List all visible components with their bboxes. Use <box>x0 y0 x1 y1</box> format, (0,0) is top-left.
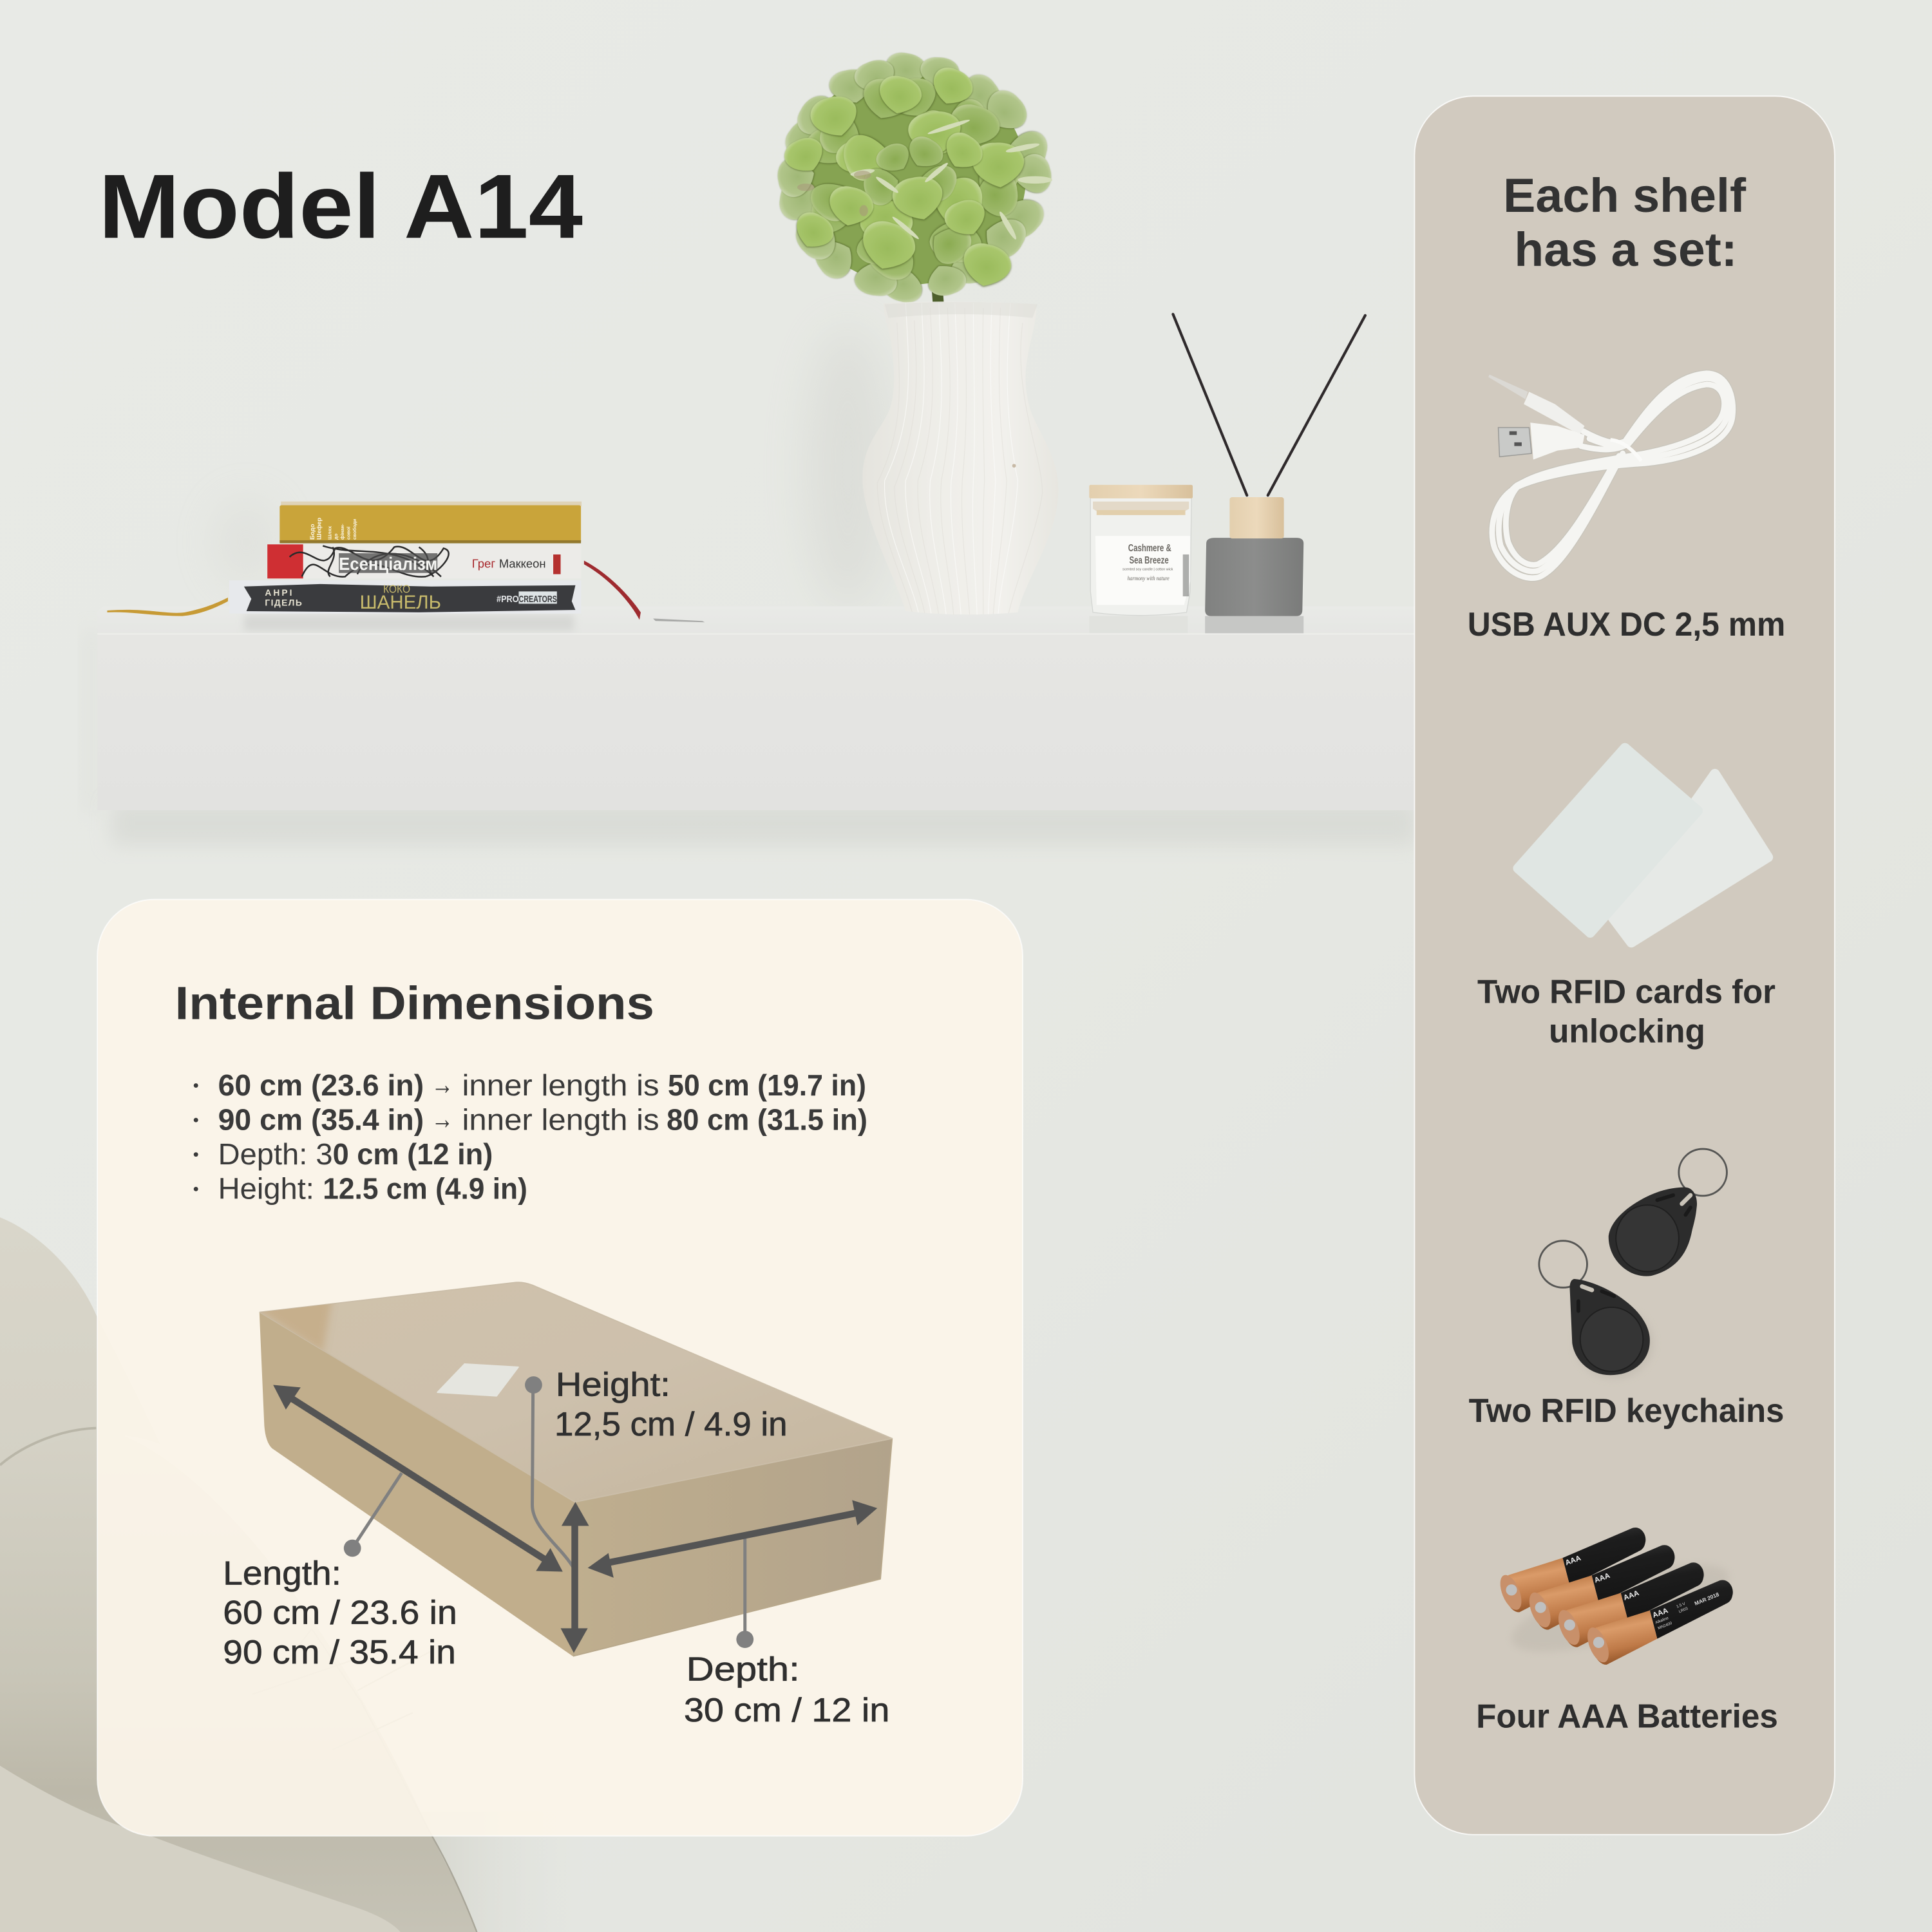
battery 4: AAA <box>1652 1607 1669 1620</box>
battery 2: AAA <box>1593 1572 1611 1585</box>
candle label: Sea Breeze <box>1130 555 1169 566</box>
yellow book pages <box>281 502 582 506</box>
bullet list: 90 cm (35.4 in) <box>218 1103 424 1136</box>
yellow book spine text <box>309 518 357 540</box>
candle label: scented soy candle | cotton wick <box>1122 567 1173 571</box>
jar lid <box>1089 485 1193 498</box>
reed sticks <box>1173 314 1365 495</box>
sofa <box>0 1217 591 1932</box>
icon: AAA batteries <box>1496 1528 1738 1669</box>
candle label <box>1122 543 1173 582</box>
candle label: harmony with nature <box>1128 575 1170 582</box>
height arrow <box>561 1502 589 1653</box>
candle label: Cashmere & <box>1128 543 1171 554</box>
bullet list: Height: <box>218 1172 314 1206</box>
label: USB: USB AUX DC 2,5 mm <box>1468 605 1785 643</box>
fob 1 <box>1609 1188 1697 1276</box>
key ring 1 <box>1679 1149 1727 1196</box>
yellow book spine text: фінан- <box>339 524 345 540</box>
bullet list: inner length is <box>462 1068 659 1102</box>
shelf reflections <box>244 615 1303 633</box>
yellow ribbon <box>107 598 228 616</box>
depth label: Depth: <box>687 1651 800 1688</box>
reed diffuser <box>1173 314 1365 616</box>
title: Model A14 <box>99 156 583 258</box>
length label: 90 cm / 35.4 in <box>223 1633 456 1671</box>
vase body <box>862 301 1058 614</box>
length label <box>223 1554 457 1671</box>
candle jar <box>1089 485 1193 616</box>
bullet list: 50 cm (19.7 in) <box>668 1068 866 1102</box>
flower petals <box>773 51 1057 305</box>
sofa: seat shadow band <box>0 1428 477 1932</box>
USB plug <box>1499 422 1584 460</box>
shelf edge <box>97 633 1417 634</box>
battery shadow <box>1503 1546 1738 1669</box>
label: RFID cards: unlocking <box>1549 1012 1705 1050</box>
book: essentialism: Есенціалізм <box>339 554 437 574</box>
book: coco chanel: CREATORS <box>518 594 557 605</box>
bullet list: → <box>431 1102 453 1135</box>
cable tie <box>1611 440 1641 461</box>
stem <box>931 286 944 303</box>
front card <box>1518 748 1698 933</box>
battery 4 <box>1583 1580 1733 1665</box>
fob 2 <box>1570 1279 1650 1375</box>
battery 3: AAA <box>1622 1589 1640 1602</box>
AUX jack <box>1488 375 1584 435</box>
bullet list: 12.5 cm (4.9 in) <box>323 1172 527 1206</box>
panel: each shelf has a set <box>1414 96 1835 1835</box>
cable loops <box>1492 374 1733 578</box>
panel background <box>1414 96 1835 1835</box>
yellow book spine text: свободи <box>352 518 357 540</box>
battery 1: AAA <box>1564 1555 1582 1567</box>
soft shadows on wall <box>84 327 1417 845</box>
icon: RFID cards <box>1518 748 1768 943</box>
battery 2 <box>1525 1545 1674 1630</box>
bullet list: 0 cm (12 in) <box>333 1137 493 1171</box>
battery 4: MN2400 <box>1657 1621 1673 1631</box>
fob shadow <box>1575 1307 1654 1379</box>
depth label <box>684 1651 889 1728</box>
yellow book <box>279 505 581 543</box>
bullet list: 80 cm (31.5 in) <box>667 1103 867 1136</box>
yellow book spine text: Шлях <box>327 526 333 540</box>
scribble <box>290 546 449 577</box>
leader lines <box>344 1376 753 1648</box>
yellow book spine text: сової <box>345 526 351 540</box>
label: keychains: Two RFID keychains <box>1469 1392 1784 1429</box>
yellow book spine text: Шефер <box>316 518 323 540</box>
book: coco chanel: ГІДЕЛЬ <box>265 598 302 608</box>
shelf top surface <box>97 606 1417 634</box>
bullet list: 60 cm (23.6 in) <box>218 1068 424 1102</box>
icon: USB AUX cable <box>1488 374 1733 578</box>
pale curled petals <box>850 118 1052 241</box>
panel: internal dimensions <box>97 900 1023 1836</box>
grey bottle <box>1205 538 1303 616</box>
box top warm corner <box>260 1303 334 1350</box>
wax <box>1095 536 1190 605</box>
length arrow <box>273 1385 563 1572</box>
panel heading <box>1503 168 1746 276</box>
white sticker <box>437 1364 518 1396</box>
battery 3 <box>1554 1562 1704 1648</box>
box left face <box>260 1312 575 1656</box>
height label <box>554 1366 788 1443</box>
panel heading: Each shelf <box>1503 168 1746 222</box>
wood cap <box>1229 497 1284 538</box>
jar glass <box>1090 498 1191 616</box>
books stack <box>107 502 705 622</box>
length label: Length: <box>223 1554 341 1591</box>
bullet list: inner length is <box>462 1103 659 1136</box>
book: coco chanel: КОКО <box>383 582 410 595</box>
back card <box>1613 774 1768 943</box>
label: batteries: Four AAA Batteries <box>1476 1697 1778 1734</box>
box right face <box>574 1439 892 1656</box>
book: coco chanel: АНРІ <box>265 588 292 598</box>
yellow book spine text: до <box>333 533 339 540</box>
label: RFID cards: Two RFID cards for <box>1477 972 1776 1010</box>
box top face <box>260 1282 892 1502</box>
panel heading: has a set: <box>1514 222 1738 276</box>
sofa: cushion seam <box>0 1428 96 1465</box>
height label: Height: <box>556 1366 670 1403</box>
icon: RFID keychains <box>1539 1149 1727 1379</box>
red ribbon <box>584 561 641 620</box>
bullet list: → <box>431 1067 453 1101</box>
shelf <box>97 606 1417 810</box>
flower: green hydrangea <box>773 51 1057 305</box>
length label: 60 cm / 23.6 in <box>223 1594 457 1631</box>
book: essentialism: Маккеон <box>499 558 546 571</box>
box diagram <box>223 1282 892 1728</box>
battery 1 <box>1496 1528 1645 1613</box>
paper slip <box>653 618 705 622</box>
panel heading: Internal Dimensions <box>175 977 654 1029</box>
key ring 2 <box>1539 1241 1587 1287</box>
brown petal accents <box>797 171 871 216</box>
book: essentialism: Грег <box>472 558 496 571</box>
bullet list <box>194 1067 867 1206</box>
battery 4: 1.5 V <box>1676 1601 1687 1609</box>
sofa: right cushion below panel <box>406 1811 591 1932</box>
depth arrow <box>588 1500 877 1578</box>
battery 4: Alkaline <box>1655 1616 1670 1625</box>
panel background <box>97 900 1023 1836</box>
yellow book spine text: Бодо <box>309 524 316 540</box>
book: coco chanel: ШАНЕЛЬ <box>360 592 441 613</box>
battery 4: MAR 2018 <box>1694 1591 1720 1607</box>
height label: 12,5 cm / 4.9 in <box>554 1405 788 1443</box>
large bright petals <box>779 63 1027 290</box>
vase <box>862 301 1058 616</box>
sofa: back cushion <box>0 1217 160 1465</box>
label: RFID cards <box>1477 972 1776 1050</box>
depth label: 30 cm / 12 in <box>684 1691 889 1728</box>
battery 4: LR03 <box>1678 1606 1689 1614</box>
book: essentialism <box>267 544 581 578</box>
vase rim shading <box>885 302 1037 318</box>
sofa: seam lines <box>252 1629 477 1932</box>
vase texture <box>877 303 1043 616</box>
book: coco chanel: #PRO <box>497 594 518 605</box>
jar stopper <box>1093 502 1189 515</box>
book: coco chanel <box>229 580 581 614</box>
sofa: front cushion <box>0 1766 401 1932</box>
bullet list: Depth: 3 <box>218 1137 333 1171</box>
shelf front <box>97 634 1417 810</box>
